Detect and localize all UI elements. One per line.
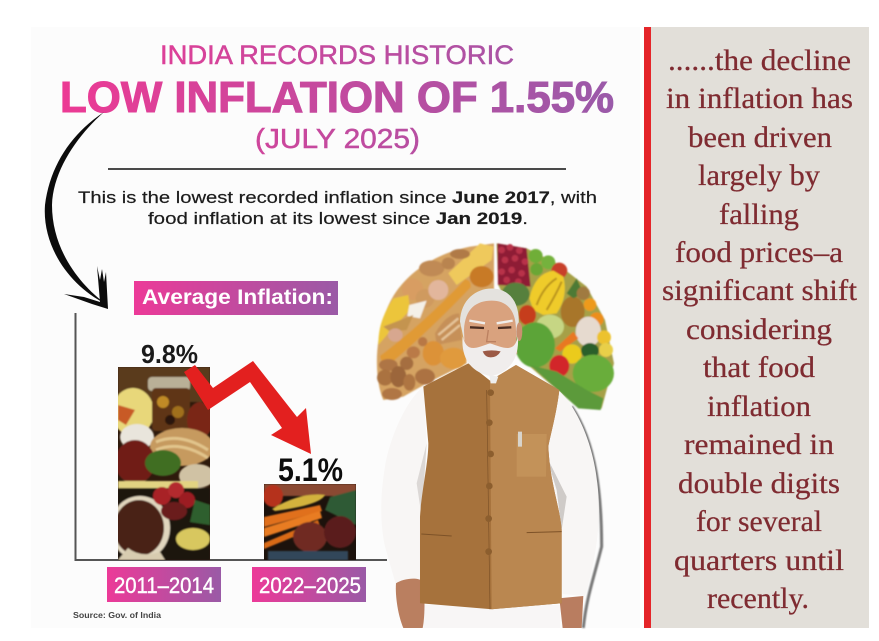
- bar: 2022-2025 food photo: [263, 484, 356, 560]
- value label 5.1%: 5.1%: [278, 452, 343, 488]
- label: 2022-2025: 2022–2025: [259, 573, 361, 598]
- icon: curved black arrow: [45, 112, 108, 309]
- accent bar: [644, 27, 651, 628]
- fruit and vegetable half: [497, 243, 614, 410]
- hands: [396, 579, 425, 628]
- head: [460, 289, 522, 376]
- label: 2022-2025: [252, 567, 366, 602]
- bread half: [377, 243, 494, 400]
- collar: [489, 375, 498, 383]
- illustration: person: [381, 289, 602, 628]
- chart: bar chart of average inflation: [76, 313, 387, 602]
- vest: [420, 363, 562, 609]
- subtitle text: This is the lowest recorded inflation since June 2017 , with: [78, 189, 597, 207]
- panel: pull quote: remained in: [684, 428, 834, 461]
- panel: pull quote: significant shift: [662, 274, 858, 307]
- panel: pull quote: in inflation has: [666, 82, 853, 115]
- kurta sleeves: [381, 387, 427, 585]
- vest buttons: [485, 389, 494, 555]
- panel: infographic: [31, 27, 640, 628]
- panel: pull quote: that food: [703, 351, 815, 384]
- panel: pull quote: quarters until: [674, 544, 844, 577]
- panel: pull quote: double digits: [678, 467, 840, 500]
- title line 2: LOW INFLATION OF 1.55%: [60, 73, 614, 122]
- heading: average inflation: [134, 281, 338, 315]
- heading: average inflation: Average Inflation:: [142, 286, 333, 309]
- shadow: [572, 407, 602, 628]
- subtitle text: [78, 189, 597, 228]
- title date: (JULY 2025): [255, 123, 420, 154]
- title line 1: INDIA RECORDS HISTORIC: [160, 40, 514, 70]
- bar: 2011-2014 food photo: [118, 367, 210, 560]
- arrow: red falling trend: [184, 361, 311, 454]
- panel: pull quote: [651, 27, 869, 628]
- panel: pull quote: falling: [719, 198, 799, 231]
- panel: pull quote: food prices–a: [675, 236, 843, 269]
- panel: pull quote: considering: [686, 313, 832, 346]
- panel: pull quote: recently.: [707, 582, 809, 615]
- label: 2011-2014: [107, 567, 221, 602]
- label: 2011-2014: 2011–2014: [114, 573, 214, 598]
- panel: pull quote: largely by: [698, 159, 820, 192]
- source note: Source: Gov. of India: [73, 611, 162, 620]
- illustration: food wheel: [377, 243, 614, 410]
- panel: pull quote: ......the decline: [668, 44, 851, 77]
- panel: pull quote: inflation: [707, 390, 811, 423]
- panel: pull quote: for several: [696, 505, 822, 538]
- subtitle text: food inflation at its lowest since Jan 2019 .: [148, 210, 528, 228]
- lower kurta: [423, 605, 560, 628]
- chart axes: [76, 313, 387, 560]
- panel: pull quote: been driven: [688, 121, 832, 154]
- value label 9.8%: 9.8%: [141, 339, 198, 369]
